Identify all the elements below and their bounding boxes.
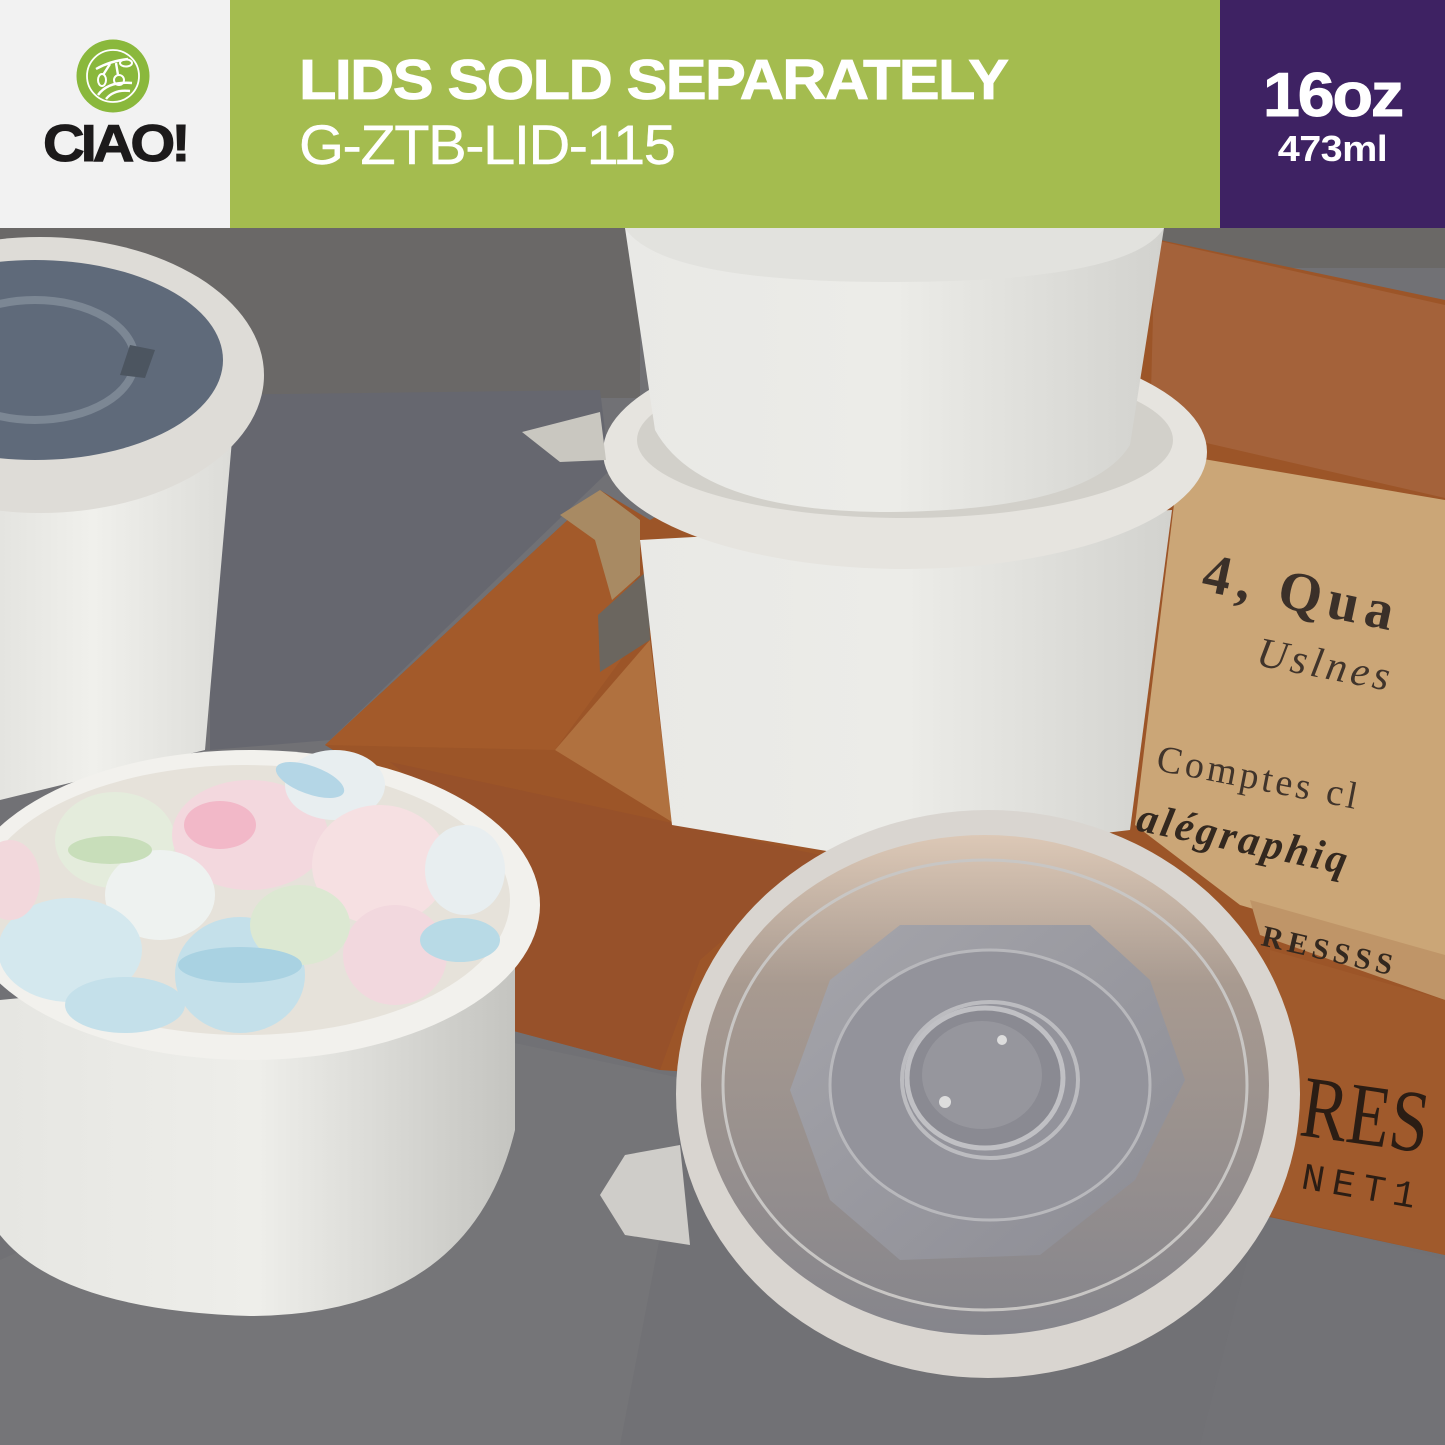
- wooden tray: [325, 240, 1445, 1255]
- rope on tray: [560, 490, 640, 600]
- wooden tray: RESSSS: [1258, 920, 1401, 983]
- size oz: 16oz: [1263, 61, 1402, 130]
- logo wordmark: CIAO!: [43, 115, 187, 173]
- wooden tray: alégraphiq: [1133, 795, 1354, 885]
- icon: logo badge: [76, 40, 150, 112]
- product code: G-ZTB-LID-115: [299, 113, 674, 176]
- left cup with lid: [0, 237, 264, 800]
- green banner: [230, 0, 1220, 228]
- wooden tray: Comptes cl: [1153, 738, 1365, 818]
- purple size panel: [1220, 0, 1445, 228]
- bowl with marshmallows: [0, 750, 540, 1316]
- wooden tray: Uslnes: [1253, 630, 1398, 701]
- size ml: 473ml: [1278, 128, 1387, 169]
- logo panel: [0, 0, 230, 228]
- clear lid: [600, 810, 1300, 1378]
- tray crate text panel: [1135, 455, 1445, 965]
- wooden tray: 4, Qua: [1197, 542, 1407, 644]
- center stacked cups: [522, 228, 1207, 860]
- wooden tray: NET1: [1298, 1157, 1427, 1221]
- heading: LIDS SOLD SEPARATELY: [299, 48, 1007, 112]
